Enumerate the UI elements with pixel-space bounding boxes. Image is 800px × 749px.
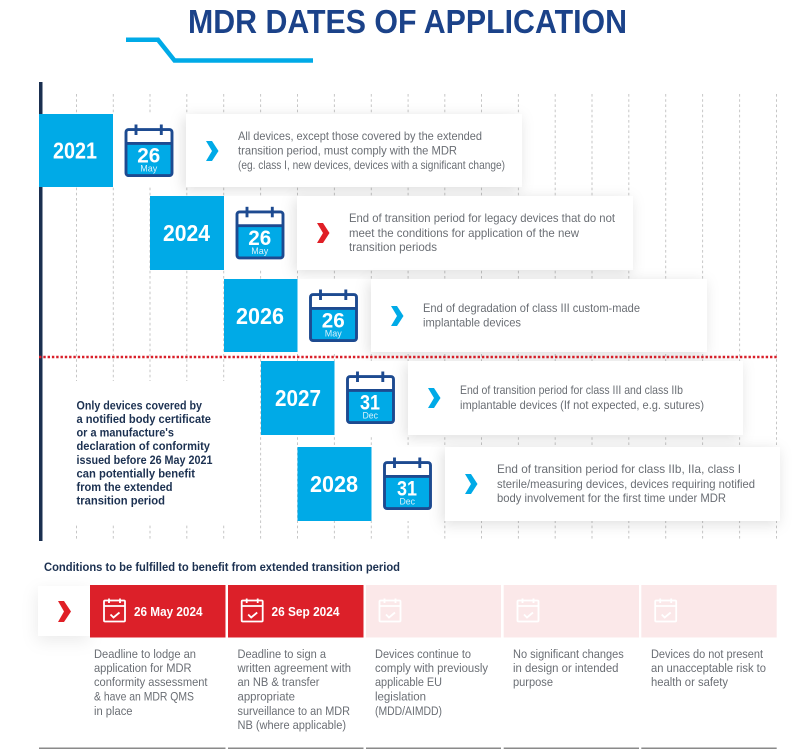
condition 1: 26 May 2024 [90, 585, 226, 718]
text card 2028: sterile/measuring devices, devices requiring notified [497, 477, 755, 491]
calendar 26 May [310, 290, 356, 341]
condition 3: continued compliance: (MDD/AIMDD) [375, 704, 442, 718]
text card 2027: End of transition period for class III and class IIb [460, 383, 683, 397]
side note: extended transition eligibility: from the extended [76, 481, 172, 494]
condition 2: 26 Sep 2024: an NB & transfer [238, 675, 320, 689]
text card 2026: implantable devices [423, 316, 521, 330]
chevron tile [38, 586, 90, 636]
year 2026 [224, 279, 298, 352]
row: 2028 [298, 447, 780, 521]
condition 3: continued compliance: legislation [375, 690, 426, 704]
timeline axis [39, 82, 42, 541]
condition 4: no significant changes: purpose [513, 675, 553, 689]
icon: calendar check [655, 598, 676, 622]
row: 2027 [261, 361, 743, 435]
calendar 31 Dec: Dec [362, 411, 378, 422]
condition 2: 26 Sep 2024: written agreement with [237, 661, 351, 675]
icon: calendar check [380, 598, 400, 622]
calendar 31 Dec [384, 458, 430, 509]
text card 2021 [186, 114, 522, 187]
conditions heading: Conditions to be fulfilled to benefit from extended transition period [44, 560, 400, 574]
title: MDR DATES OF APPLICATION [188, 3, 627, 40]
text card 2024: End of transition period for legacy devices that do not [349, 211, 616, 225]
year 2027 [261, 361, 334, 435]
text card 2026: End of degradation of class III custom-made [423, 301, 640, 315]
side note: extended transition eligibility: or a manufacture's [76, 427, 174, 440]
condition 5: no unacceptable risk: Devices do not present [651, 647, 764, 661]
icon: calendar check [518, 598, 538, 622]
text card 2024: meet the conditions for application of the new [349, 226, 579, 240]
side note: extended transition eligibility: can potentially benefit [76, 467, 195, 480]
red dotted divider [39, 356, 777, 358]
side note: extended transition eligibility: Only devices covered by [76, 400, 202, 412]
year 2024: 2024 [163, 220, 210, 246]
text card 2027: implantable devices (If not expected, e.g. sutures) [460, 398, 704, 412]
year 2021: 2021 [53, 138, 97, 164]
row: 2026 [224, 279, 707, 352]
side note: extended transition eligibility: issued before 26 May 2021 [76, 454, 213, 467]
icon: calendar check [242, 598, 263, 622]
text card 2028: End of transition period for class IIb, IIa, class I [497, 462, 741, 476]
condition 1: 26 May 2024: 26 May 2024 [134, 604, 203, 619]
condition 1: 26 May 2024: application for MDR [94, 661, 192, 675]
year 2026: 2026 [236, 303, 284, 329]
calendar 31 Dec: Dec [400, 497, 415, 508]
row: 2021 [39, 114, 522, 187]
text card 2027 [408, 361, 743, 435]
condition 3: continued compliance: comply with previously [375, 661, 489, 675]
year 2028: 2028 [310, 471, 358, 497]
calendar 26 May: May [140, 164, 158, 175]
condition 2: 26 Sep 2024: 26 Sep 2024 [272, 604, 340, 619]
condition 1: 26 May 2024: in place [94, 704, 133, 718]
calendar 31 Dec [348, 372, 394, 423]
year 2027: 2027 [275, 385, 321, 411]
condition 4: no significant changes [504, 585, 639, 689]
side note: extended transition eligibility: declaration of conformity [76, 440, 211, 453]
calendar 26 May: May [251, 246, 269, 257]
text card 2028: body involvement for the first time under MDR [497, 491, 726, 505]
calendar 31 Dec: 31 [397, 478, 417, 500]
condition 3: continued compliance: Devices continue to [375, 647, 471, 661]
condition 1: 26 May 2024: & have an MDR QMS [94, 690, 194, 704]
text card 2021: transition period, must comply with the MDR [238, 144, 457, 158]
text card 2026 [371, 279, 707, 352]
row: 2024 [150, 196, 633, 270]
condition 3: continued compliance [366, 585, 501, 718]
calendar 26 May [237, 207, 283, 258]
calendar 26 May: 26 [248, 227, 271, 250]
condition 3: continued compliance: applicable EU [375, 675, 442, 689]
condition 2: 26 Sep 2024: NB (where applicable) [238, 718, 346, 732]
condition 5: no unacceptable risk: health or safety [651, 675, 729, 689]
side note: extended transition eligibility: a notified body certificate [76, 413, 212, 426]
text card 2024: transition periods [349, 240, 437, 254]
condition 2: 26 Sep 2024: Deadline to sign a [238, 647, 326, 661]
side note: extended transition eligibility [76, 400, 213, 508]
condition 2: 26 Sep 2024: appropriate [238, 690, 295, 704]
condition 2: 26 Sep 2024: surveillance to an MDR [238, 704, 350, 718]
condition 5: no unacceptable risk: an unacceptable risk to [651, 661, 766, 675]
year 2021 [39, 114, 113, 187]
title accent line [126, 40, 313, 60]
icon: calendar check [104, 598, 125, 622]
calendar 26 May: 26 [322, 310, 345, 332]
condition 5: no unacceptable risk [641, 585, 777, 689]
side note: extended transition eligibility: transition period [76, 495, 165, 508]
year 2024 [150, 196, 224, 270]
condition 1: 26 May 2024: Deadline to lodge an [94, 647, 196, 661]
condition 4: no significant changes: in design or intended [513, 661, 618, 675]
calendar 26 May: May [325, 329, 342, 340]
year 2028 [298, 447, 372, 521]
condition 1: 26 May 2024: conformity assessment [94, 675, 208, 689]
calendar 26 May: 26 [137, 144, 160, 168]
text card 2021: All devices, except those covered by the extended [238, 129, 482, 143]
text card 2021: (eg. class I, new devices, devices with a significant change) [238, 158, 505, 172]
calendar 31 Dec: 31 [360, 392, 380, 414]
calendar 26 May [126, 124, 172, 176]
text card 2024 [297, 196, 633, 270]
condition 2: 26 Sep 2024 [228, 585, 364, 732]
text card 2028 [445, 447, 780, 521]
condition 4: no significant changes: No significant changes [513, 647, 624, 661]
